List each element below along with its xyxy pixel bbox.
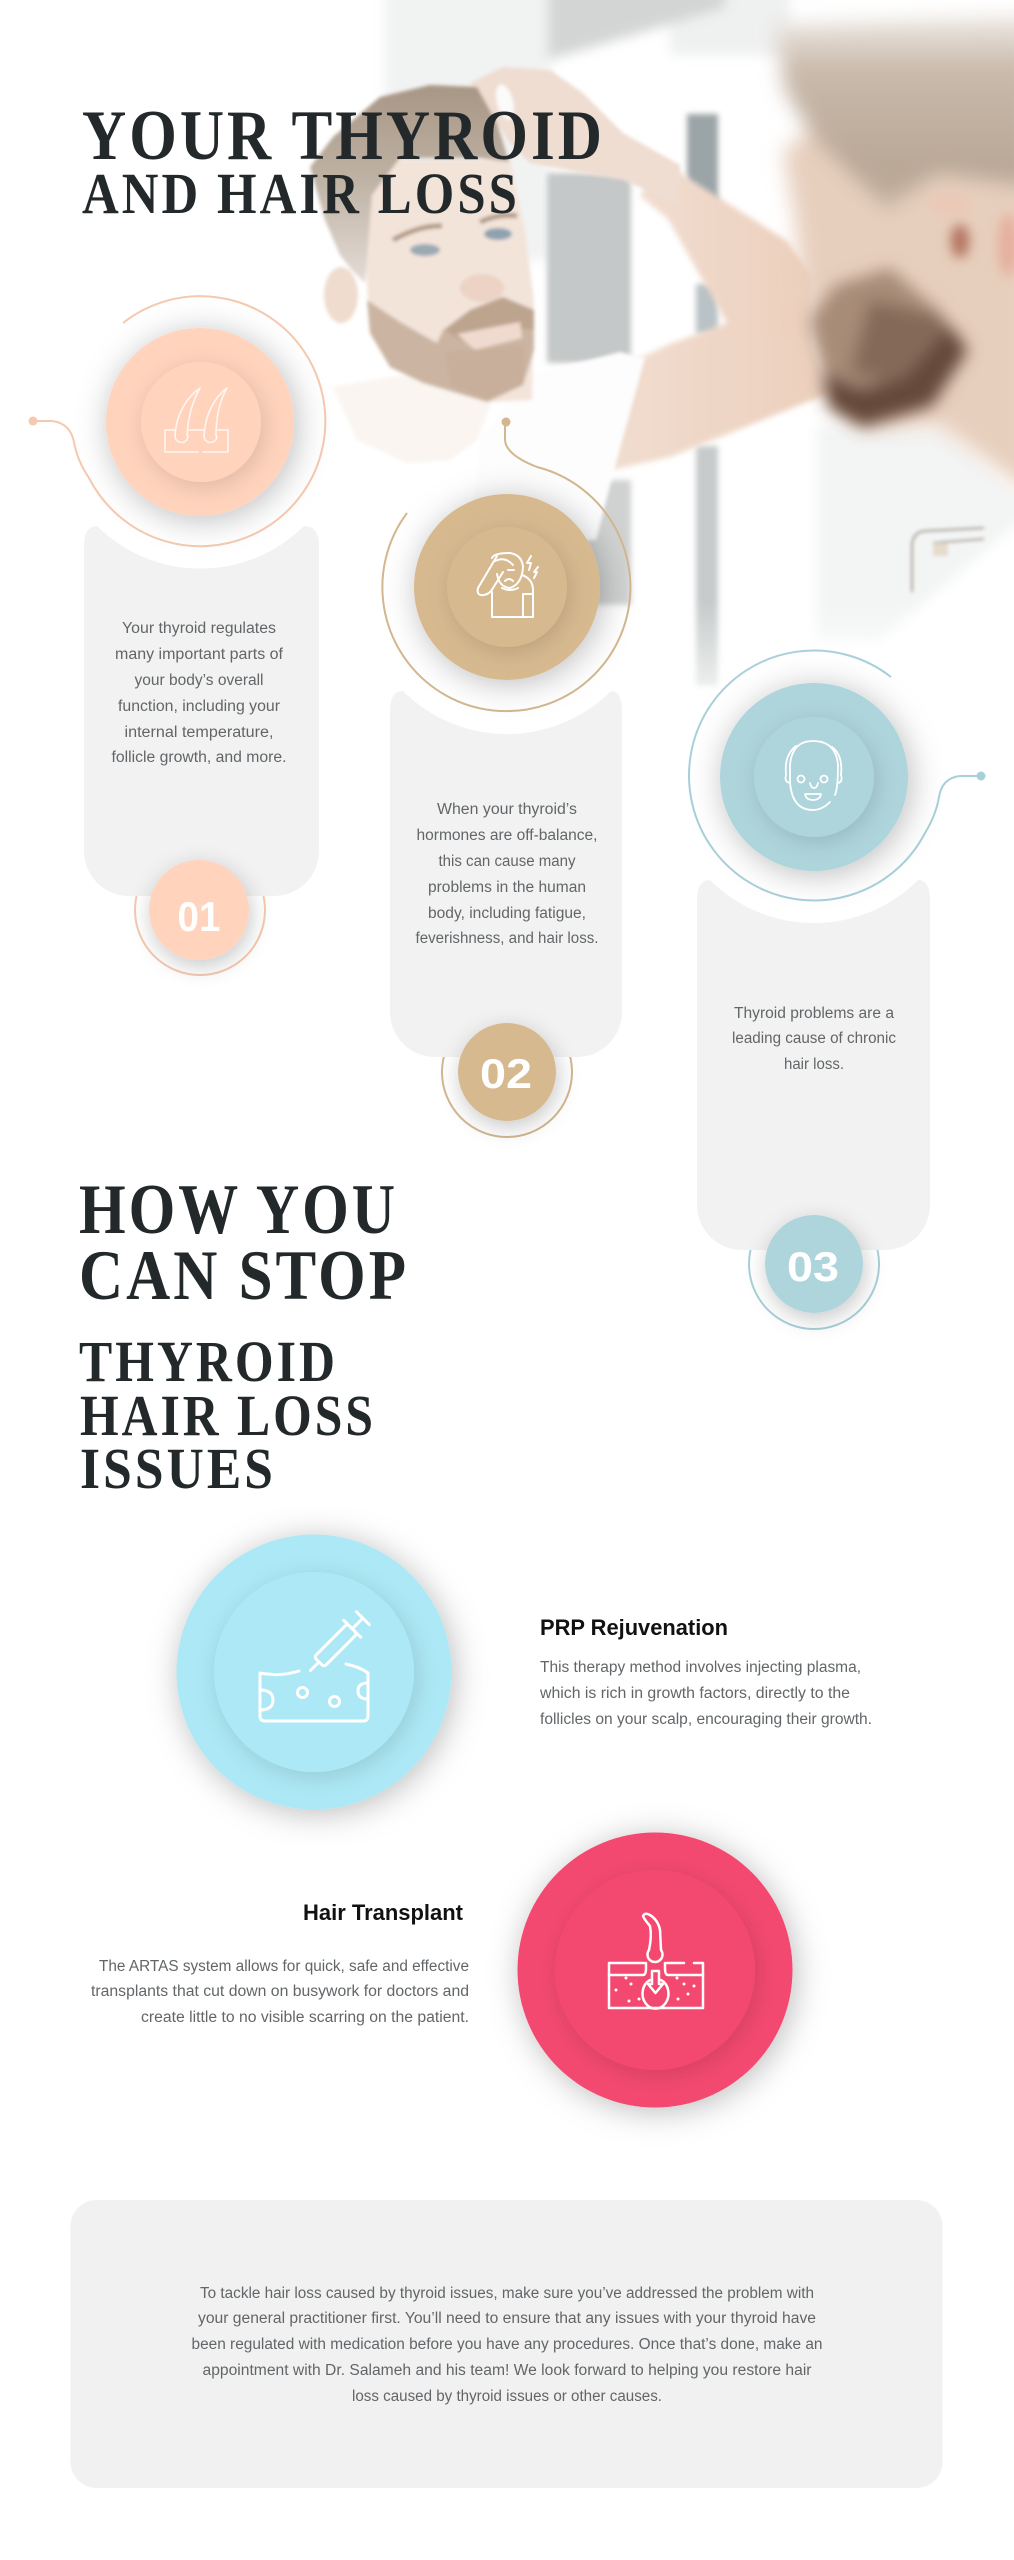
card 1 text: many important parts of	[115, 646, 284, 663]
closing text: been regulated with medication before you have any procedures. Once that’s done, make an	[192, 2336, 822, 2353]
card 3	[697, 880, 930, 1250]
card 2	[390, 691, 622, 1057]
closing panel	[70, 2200, 942, 2488]
heading: thyroid hair loss issues: ISSUES	[80, 1436, 276, 1501]
number badge 02: 02	[480, 1050, 532, 1097]
card 1 text: follicle growth, and more.	[112, 749, 286, 766]
ring and connector 3	[689, 650, 986, 900]
card 2 text: When your thyroid’s	[437, 801, 577, 818]
card 1 text: Your thyroid regulates	[122, 620, 276, 637]
number badge rings behind cards	[135, 845, 879, 1329]
icon: syringe injecting scalp	[260, 1610, 371, 1721]
Hair transplant text	[91, 1900, 469, 2026]
card 1 text: function, including your	[118, 698, 280, 715]
number badge 01	[149, 860, 249, 960]
heading: thyroid hair loss issues: THYROID	[79, 1329, 338, 1394]
number badge 03: 03	[787, 1243, 839, 1290]
PRP disc	[176, 1534, 452, 1810]
title: your thyroid and hair loss: YOUR THYROID	[82, 97, 605, 175]
icon: hair follicles	[165, 388, 228, 452]
Hair transplant text: Hair Transplant	[303, 1900, 464, 1925]
title: your thyroid and hair loss: AND HAIR LOSS	[82, 161, 520, 226]
heading: how you can stop: CAN STOP	[79, 1237, 409, 1315]
closing text: To tackle hair loss caused by thyroid issues, make sure you’ve addressed the problem with	[200, 2285, 814, 2302]
disc 2	[414, 494, 600, 680]
card 2 text: hormones are off-balance,	[416, 827, 598, 844]
heading: thyroid hair loss issues	[79, 1329, 376, 1501]
closing text: appointment with Dr. Salameh and his team! We look forward to helping you restore hair	[202, 2362, 811, 2379]
card 1 text: your body’s overall	[134, 672, 264, 689]
card 2 text: problems in the human	[428, 879, 586, 896]
card 1 text	[112, 620, 286, 766]
Hair transplant disc	[518, 1832, 792, 2108]
card 1 text: internal temperature,	[124, 724, 274, 741]
card 2 text: this can cause many	[438, 853, 576, 870]
background photo: man looking in mirror	[0, 0, 1014, 725]
ring and connector 2	[382, 418, 630, 711]
PRP text	[539, 1615, 872, 1728]
Hair transplant text: create little to no visible scarring on the patient.	[141, 2009, 469, 2026]
closing text: your general practitioner first. You’ll need to ensure that any issues with your thyroid have	[198, 2310, 816, 2327]
card 1	[84, 526, 319, 896]
wall switch	[912, 528, 984, 592]
icon: person with headache	[478, 553, 538, 617]
Hair transplant text: transplants that cut down on busywork for doctors and	[91, 1983, 469, 2000]
disc 3	[720, 683, 908, 871]
card 3 text	[732, 1005, 896, 1073]
card 3 text: Thyroid problems are a	[734, 1005, 894, 1022]
Hair transplant text: The ARTAS system allows for quick, safe and effective	[99, 1958, 469, 1975]
heading: how you can stop: HOW YOU	[79, 1171, 398, 1249]
number badge 03	[765, 1215, 863, 1313]
card 3 text: leading cause of chronic	[732, 1030, 896, 1047]
number badge 01: 01	[178, 893, 220, 940]
heading: how you can stop	[79, 1171, 409, 1315]
card 2 text: body, including fatigue,	[428, 905, 586, 922]
card 3 text: hair loss.	[784, 1056, 844, 1073]
ring and connector 1	[28, 296, 325, 546]
PRP text: which is rich in growth factors, directly to the	[539, 1685, 850, 1702]
PRP text: This therapy method involves injecting plasma,	[540, 1659, 861, 1676]
card 2 text: feverishness, and hair loss.	[416, 930, 598, 947]
icon: hair follicle in skin	[609, 1914, 703, 2009]
disc 1	[106, 328, 294, 516]
closing text	[192, 2285, 822, 2405]
heading: thyroid hair loss issues: HAIR LOSS	[80, 1383, 376, 1448]
number badge 02	[458, 1023, 556, 1121]
closing text: loss caused by thyroid issues or other causes.	[352, 2388, 662, 2405]
PRP text: PRP Rejuvenation	[540, 1615, 728, 1640]
icon: balding face	[786, 741, 842, 810]
title: your thyroid and hair loss	[82, 97, 605, 226]
PRP text: follicles on your scalp, encouraging their growth.	[540, 1711, 872, 1728]
card 2 text	[416, 801, 598, 947]
